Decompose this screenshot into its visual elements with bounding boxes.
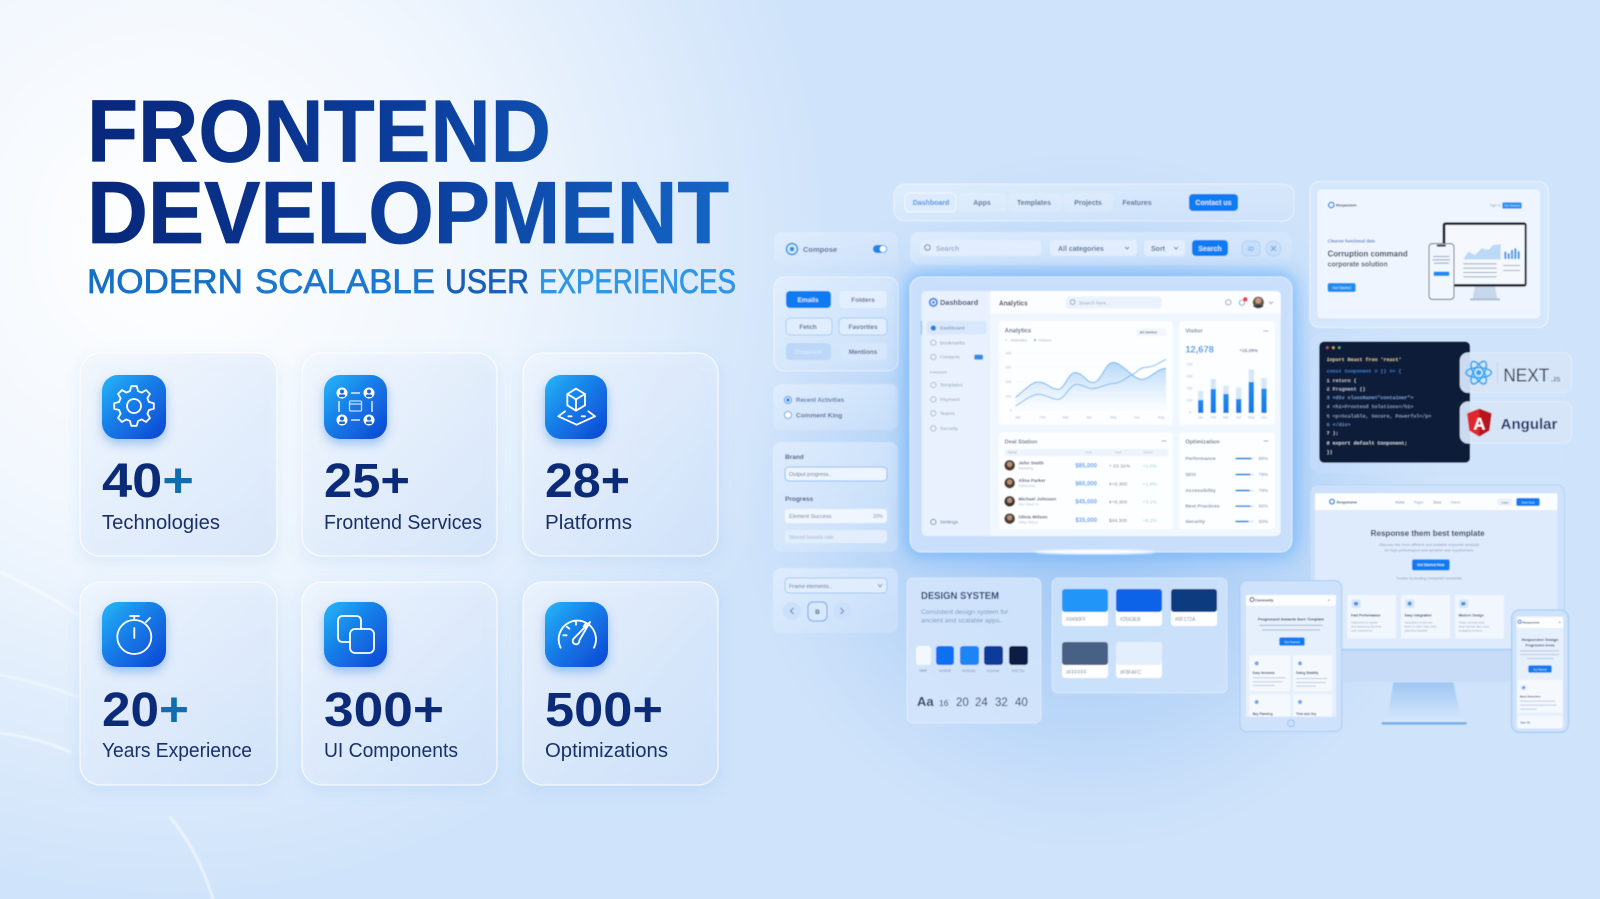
sidebar: Dashboard <box>940 326 965 332</box>
icon: overlapping squares <box>324 602 387 667</box>
bar chart card: 150 <box>1187 387 1193 391</box>
panel: phone: ≡ <box>1559 620 1561 624</box>
optimization card <box>1179 432 1275 529</box>
color swatches: #2563eb <box>962 669 976 673</box>
line chart card: 200 <box>1005 380 1011 384</box>
panel: top navigation: Projects <box>1074 200 1102 207</box>
panel: responsive monitor: flows to other easy sites <box>1405 624 1437 628</box>
deals table card: +6.2% <box>1143 518 1158 524</box>
deals table card: Status <box>1143 450 1153 454</box>
panel: pagination <box>773 568 898 633</box>
icon: service network <box>324 375 387 439</box>
subtitle: SCALABLE <box>255 263 435 301</box>
panel: stat ui components <box>302 582 497 785</box>
sidebar: Payment <box>940 397 960 403</box>
optimization card: Optimization <box>1185 439 1220 445</box>
line chart card: Aug <box>1158 415 1164 419</box>
monitor mock <box>1443 222 1527 300</box>
panel: button set <box>774 277 898 371</box>
stat number: 25+ <box>324 455 410 508</box>
sidebar: Teams <box>940 411 955 417</box>
panel: tablet: Time and Joy <box>1296 712 1316 716</box>
panel: color palette: #F8FAFC <box>1120 670 1142 676</box>
panel: responsive monitor: Discover the more efficient and scalable response template <box>1379 543 1480 547</box>
panel: button set: Folders <box>851 297 875 304</box>
panel: form: Progress <box>785 496 814 503</box>
panel: top navigation: Apps <box>973 200 991 207</box>
bar chart card: Mar <box>1223 416 1230 420</box>
stat label: Years Experience <box>102 740 252 762</box>
panel: top navigation: Dashboard <box>913 200 949 207</box>
deals table card: Deal Station <box>1005 439 1038 445</box>
stat number: 300+ <box>324 684 444 737</box>
badge: next js: NEXT <box>1503 364 1549 385</box>
panel: landing page preview: Corruption command <box>1328 249 1408 258</box>
panel: phone: Responsive Design <box>1522 637 1559 642</box>
subtitle: EXPERIENCES <box>539 263 736 301</box>
panel: phone: See All <box>1520 721 1530 725</box>
sidebar: Framework <box>930 371 947 375</box>
bar chart card: May <box>1248 416 1255 420</box>
panel: responsive monitor: Trusted by leading companies worldwide <box>1396 577 1462 581</box>
line chart card: Analytics <box>1005 329 1032 335</box>
panel: search toolbar: All categories <box>1058 246 1104 253</box>
panel: form <box>773 442 898 552</box>
panel: code editor: 4 <h1>Frontend Solutions</h1> <box>1327 404 1413 410</box>
color swatches <box>916 646 1028 673</box>
description: ancient and scalable apps. <box>921 618 1002 624</box>
deals table card: Marketing <box>1018 466 1033 470</box>
deals table card: Alina Parker <box>1018 478 1046 483</box>
stat number: 20+ <box>102 684 189 737</box>
stat label: Frontend Services <box>324 512 482 534</box>
panel: tablet: ≡ <box>1328 598 1330 602</box>
optimization card: Performance <box>1185 456 1216 462</box>
panel: color palette: #3490FF <box>1066 617 1086 623</box>
panel: responsive monitor: Login <box>1501 500 1509 504</box>
panel: responsive monitor: Teams <box>1450 500 1461 504</box>
stat label: UI Components <box>324 740 458 762</box>
panel: stat platforms <box>523 353 718 556</box>
type scale: 16 <box>939 698 949 708</box>
line chart card: 100 <box>1005 394 1011 398</box>
badge: angular: A <box>1473 414 1485 433</box>
panel: code editor: 5 <p>Scalable, Secure, Powerful</p> <box>1327 413 1431 419</box>
header: Search here... <box>1079 300 1110 306</box>
phone mock <box>1429 244 1454 299</box>
panel: code editor <box>1310 333 1567 473</box>
panel: color palette: #2563EB <box>1120 617 1141 623</box>
bar chart card: Jun <box>1261 416 1267 420</box>
panel: landing page preview: Sign In <box>1490 204 1501 208</box>
line chart card: 300 <box>1005 366 1011 370</box>
bar chart card: 12,678 <box>1185 345 1214 355</box>
panel: landing page preview: Responsive <box>1336 204 1357 208</box>
deals table card: Office Wilson <box>1018 520 1038 524</box>
deals table card: + £2.31% <box>1109 464 1131 470</box>
panel: phone <box>1512 610 1568 732</box>
panel: tablet: Progressed towards their Template <box>1258 617 1325 622</box>
panel: landing page preview: Cleanse functional data <box>1328 238 1375 243</box>
panel: search toolbar: ID <box>1248 247 1255 253</box>
subtitle <box>87 263 736 301</box>
panel: responsive monitor: planning towards. <box>1405 629 1428 633</box>
icon: cube on platform <box>545 375 607 439</box>
panel: form: Output progress.. <box>789 472 832 478</box>
panel: responsive monitor: Optimized for speed <box>1351 620 1378 624</box>
panel: tablet: Bay Planning <box>1253 712 1273 716</box>
deals table card: ¢+6,300 <box>1109 500 1127 506</box>
panel: code editor: 8 export default Component; <box>1327 441 1407 447</box>
panel: phone: Get Started <box>1533 667 1547 671</box>
panel: top navigation: Features <box>1122 200 1152 207</box>
type scale: 24 <box>975 697 988 709</box>
bar chart card: 0 <box>1189 410 1191 414</box>
badge: angular <box>1460 402 1572 443</box>
icon: stopwatch <box>102 602 166 667</box>
line chart card: Apr <box>1087 415 1093 419</box>
panel: landing page preview: corporate solution <box>1328 260 1388 269</box>
stat label: Platforms <box>545 512 632 534</box>
panel: compose: Compose <box>803 245 837 254</box>
title: FRONTEND <box>87 82 551 180</box>
optimization card: SEO <box>1185 472 1196 478</box>
panel: responsive monitor: Home <box>1396 500 1405 504</box>
panel: responsive monitor: Response them best template <box>1371 529 1485 538</box>
description <box>921 609 1009 624</box>
deals table card: $44,300 <box>1109 518 1127 524</box>
optimization card: Best Practices <box>1185 504 1220 510</box>
panel: radio options <box>773 384 898 430</box>
panel: responsive monitor: Modern Design <box>1459 614 1484 618</box>
line chart card: Visitors <box>1038 338 1051 343</box>
panel: design system <box>907 578 1041 723</box>
line chart card: Feb <box>1040 415 1046 419</box>
panel: code editor: import React from 'react' <box>1327 357 1401 363</box>
line chart card: 400 <box>1005 351 1011 355</box>
type scale: 40 <box>1015 697 1028 709</box>
panel: search toolbar: Sort <box>1151 246 1166 253</box>
sidebar: Dashboard <box>940 298 978 307</box>
panel: form: Brand <box>785 454 804 461</box>
panel: search toolbar: Search <box>1198 246 1222 253</box>
panel: pagination: B <box>815 609 820 616</box>
panel: responsive monitor: Start Now <box>1521 500 1535 504</box>
panel: search toolbar: Search <box>936 246 959 253</box>
line chart card <box>999 321 1173 425</box>
panel: pagination: Frame elements.. <box>789 584 832 590</box>
type scale: Aa <box>917 694 934 709</box>
sidebar <box>927 298 987 526</box>
optimization card: 86% <box>1259 456 1268 461</box>
bar chart card: 200 <box>1187 375 1193 379</box>
deals table card: ¢+6,300 <box>1109 481 1127 487</box>
sidebar: Settings <box>940 520 959 526</box>
panel: responsive monitor: user experience. <box>1351 629 1373 633</box>
panel: search toolbar <box>910 232 1292 265</box>
panel: tablet: Community <box>1255 598 1273 602</box>
deals table card: $45,000 <box>1075 500 1098 506</box>
deals table card: Sale <box>1115 450 1122 454</box>
panel: tablet <box>1240 581 1342 732</box>
panel: color palette <box>1052 578 1227 693</box>
panel: responsive monitor: Clean minimal style <box>1459 620 1485 624</box>
panel: code editor: 6 </div> <box>1327 422 1351 428</box>
contact button: Contact us <box>1195 200 1232 207</box>
stat number: 40+ <box>102 455 194 508</box>
panel: phone: Responsive <box>1523 620 1540 624</box>
stat number: 500+ <box>545 684 663 737</box>
panel: responsive monitor: and delivering dynamic <box>1351 624 1382 628</box>
UI mockup collage <box>773 182 1572 732</box>
panel: responsive monitor: Pages <box>1414 500 1424 504</box>
contact button <box>1189 194 1238 211</box>
bar chart card: Feb <box>1210 416 1216 420</box>
panel: responsive monitor: for high performance and dynamic user experiences. <box>1385 549 1474 553</box>
stat label: Optimizations <box>545 740 668 762</box>
panel: responsive monitor: Easy Integration <box>1405 614 1432 618</box>
header <box>999 297 1273 308</box>
panel: button set: Emails <box>798 297 819 304</box>
line chart card: May <box>1110 415 1117 419</box>
panel: form: Element Success <box>789 514 832 520</box>
deals table card: Name <box>1008 450 1017 454</box>
deals table card: +1.8% <box>1143 481 1158 487</box>
icon: gear <box>102 375 166 439</box>
panel: landing page preview <box>1310 182 1548 327</box>
icon: speedometer <box>545 602 608 667</box>
header: Analytics <box>999 298 1028 307</box>
panel: stat technologies <box>80 353 277 556</box>
deals table card: Deal <box>1085 450 1092 454</box>
optimization card: 79% <box>1259 488 1268 493</box>
line chart card: All Device <box>1140 330 1157 334</box>
line chart card: Jun <box>1134 415 1140 419</box>
panel: code editor: const Component = () => { <box>1327 369 1401 375</box>
deals table card: Vice Head Co. <box>1018 502 1040 506</box>
optimization card: Accessibility <box>1185 488 1216 494</box>
panel: responsive monitor: Seamless on the site <box>1405 620 1433 624</box>
optimization card: 92% <box>1259 504 1268 509</box>
sidebar: Bookmarks <box>940 340 965 346</box>
panel: compose <box>774 232 898 265</box>
panel: responsive monitor: clear layouts also more <box>1459 624 1490 628</box>
panel: button set: Mentions <box>849 349 878 356</box>
panel: color palette: #FFFFFF <box>1066 670 1087 676</box>
bar chart card: 100 <box>1187 399 1193 403</box>
line chart card: Mar <box>1063 415 1069 419</box>
bar chart card: 300 <box>1187 363 1193 367</box>
panel: responsive monitor: Fast Performance <box>1351 614 1380 618</box>
optimization card: 50% <box>1259 519 1268 524</box>
title: DEVELOPMENT <box>87 163 729 262</box>
sidebar: Security <box>940 426 959 432</box>
panel: responsive monitor: Responsive <box>1337 500 1357 504</box>
sidebar: Templates <box>940 383 963 389</box>
deals table card: John Smith <box>1018 460 1044 465</box>
panel: stat frontend services <box>302 353 497 556</box>
deals table card: Michael Johnson <box>1018 496 1056 501</box>
panel: code editor: 7 ); <box>1327 431 1339 437</box>
line chart card: Websites <box>1011 338 1027 343</box>
color swatches: #0f172a <box>1012 669 1024 673</box>
deals table card <box>999 432 1173 529</box>
color swatches: #ffffff <box>919 669 927 673</box>
panel: stat optimizations <box>523 582 718 785</box>
panel: phone: Progressive Areas <box>1525 643 1555 647</box>
panel: responsive monitor: Get Started Now <box>1417 563 1445 567</box>
panel: responsive monitor <box>1310 485 1564 725</box>
panel: form: Stored boosts rate <box>789 535 834 541</box>
deals table card: $60,000 <box>1075 481 1098 487</box>
color swatches: #3490ff <box>939 669 951 673</box>
bar chart card: Visitor <box>1185 329 1204 335</box>
panel: color palette: #0F172A <box>1175 617 1196 623</box>
stat label: Technologies <box>102 512 220 534</box>
badge: angular: Angular <box>1501 416 1557 433</box>
title <box>87 82 729 262</box>
panel: radio options: Recent Activities <box>796 398 845 404</box>
panel: stat years experience <box>80 582 277 785</box>
subtitle: MODERN <box>87 263 243 301</box>
panel: button set: Disabled <box>794 349 822 356</box>
panel: code editor: 3 <div className="container"> <box>1327 395 1413 401</box>
deals table card: Partnership <box>1018 484 1036 488</box>
description: Consistent design system for <box>921 609 1009 616</box>
panel: landing page preview: Get Started <box>1504 204 1520 208</box>
panel: dashboard window <box>906 273 1296 556</box>
subtitle: USER <box>445 263 529 301</box>
badge: next js: .JS <box>1551 376 1561 383</box>
deals table card: +3.1% <box>1143 500 1158 506</box>
heading: DESIGN SYSTEM <box>921 590 999 602</box>
deals table card: +2.5% <box>1143 464 1158 470</box>
bar chart card: +15.29% <box>1239 348 1259 353</box>
bar chart card: Apr <box>1236 416 1242 420</box>
panel: code editor: 1 return ( <box>1327 378 1357 384</box>
type scale <box>917 694 1028 709</box>
panel: tablet: Swing Stability <box>1296 671 1319 675</box>
panel: tablet: Get Started <box>1284 640 1300 644</box>
panel: button set: Favorites <box>849 324 878 331</box>
type scale: 32 <box>995 697 1008 709</box>
optimization card: Security <box>1185 519 1205 525</box>
panel: responsive monitor: engaging screens. <box>1459 629 1483 633</box>
panel: radio options: Comment King <box>796 412 842 420</box>
deals table card: $85,000 <box>1075 464 1098 470</box>
line chart card: 0 <box>1010 408 1012 412</box>
panel: top navigation: Templates <box>1017 200 1051 207</box>
deals table card: $35,000 <box>1075 518 1098 524</box>
panel: landing page preview: Get Started <box>1332 286 1351 290</box>
line chart card: Jan <box>1015 415 1021 419</box>
sidebar: Contacts <box>940 355 960 361</box>
bar chart card <box>1179 321 1275 425</box>
panel: code editor: 2 Fragment () <box>1327 387 1366 393</box>
panel: top navigation <box>894 184 1294 221</box>
stat number: 28+ <box>545 455 630 508</box>
bar chart card: Jan <box>1198 416 1203 420</box>
panel: form: 39% <box>873 514 884 520</box>
panel: code editor: }) <box>1327 449 1333 455</box>
color swatches: #1e40af <box>987 669 999 673</box>
panel: responsive monitor: Docs <box>1434 500 1441 504</box>
badge: next js <box>1460 353 1572 393</box>
type scale: 20 <box>956 697 969 709</box>
panel: button set: Fetch <box>799 324 817 331</box>
panel: tablet: Easy Sessions <box>1253 671 1275 675</box>
panel: phone: Best Selection <box>1520 694 1541 698</box>
optimization card: 78% <box>1259 472 1268 477</box>
deals table card: Olivia Wilson <box>1018 515 1048 520</box>
